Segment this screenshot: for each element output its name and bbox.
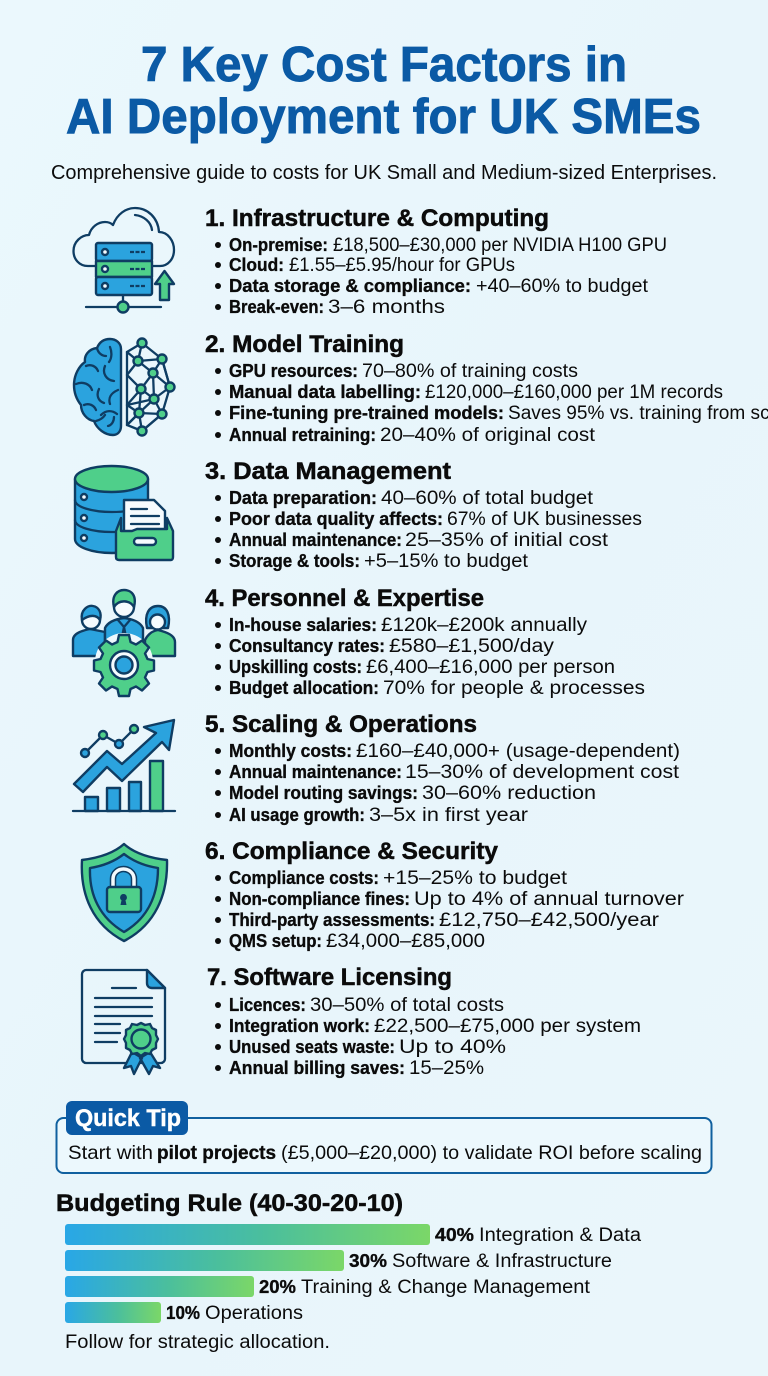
bullet list [215,994,641,1079]
section heading: 5. Scaling & Operations [205,711,477,738]
bullet list: Model routing savings: [229,782,418,803]
panel: budgeting rule [56,1190,641,1353]
section heading: 2. Model Training [205,331,404,358]
bullet list: GPU resources: [229,360,358,381]
bullet list: 3–6 months [328,297,445,318]
section heading: 1. Infrastructure & Computing [205,205,549,232]
bullet list: Manual data labelling: [229,381,421,402]
bullet list: Non-compliance fines: [229,888,410,909]
bullet list: 3–5x in first year [369,805,529,826]
bar: 40 percent: 40% [435,1224,474,1245]
bar: 10 percent: Operations [205,1303,303,1324]
bullet list: Break-even: [229,296,324,317]
bullet list: Compliance costs: [229,867,379,888]
bullet list: 70% for people & processes [383,678,645,699]
bullet list: +5–15% to budget [364,551,529,572]
bullet list: Annual retraining: [229,424,376,445]
bullet list [215,234,667,318]
bullet list: Up to 40% [399,1037,506,1058]
bullet list: +40–60% to budget [476,276,649,297]
bullet list: Annual maintenance: [229,529,402,550]
bullet list: QMS setup: [229,930,322,951]
bullet list [215,487,642,572]
bullet list: £580–£1,500/day [389,636,555,657]
bullet list [215,867,685,952]
title: 7 Key Cost Factors in [141,38,627,92]
icon: brain and neural network [74,338,174,436]
icon: team with gear [73,590,175,696]
bullet list: £160–£40,000+ (usage-dependent) [356,741,680,762]
bullet list [215,614,645,699]
bullet list: Unused seats waste: [229,1036,395,1057]
bullet list: 70–80% of training costs [362,361,578,382]
bullet list: Poor data quality affects: [229,508,443,529]
bullet list: Consultancy rates: [229,635,385,656]
bullet list: AI usage growth: [229,804,365,825]
bullet list: Annual maintenance: [229,761,402,782]
bullet list: Up to 4% of annual turnover [414,889,685,910]
bullet list: 15–30% of development cost [405,762,680,783]
bullet list: £12,750–£42,500/year [439,910,660,931]
bullet list [215,360,768,446]
bullet list: Third-party assessments: [229,909,435,930]
budgeting heading: Budgeting Rule (40-30-20-10) [56,1190,403,1217]
bullet list: 15–25% [409,1058,484,1079]
bullet list: Data preparation: [229,487,377,508]
tip box [56,1118,712,1173]
bullet list: 20–40% of original cost [380,425,596,446]
panel: quick tip [56,1101,712,1173]
subtitle: Comprehensive guide to costs for UK Small and Medium-sized Enterprises. [51,161,717,184]
bar: 10 percent: 10% [166,1302,200,1323]
bullet list: In-house salaries: [229,614,377,635]
bullet list: Budget allocation: [229,677,379,698]
bar: 30 percent [65,1250,612,1272]
title [66,38,701,144]
bullet list: 30–50% of total costs [310,995,504,1016]
bullet list: Storage & tools: [229,550,360,571]
panel: data management [75,458,642,572]
icon: cloud server [74,208,174,312]
bullet list: Upskilling costs: [229,656,362,677]
bullet list: £120k–£200k annually [381,615,588,636]
bullet list: Integration work: [229,1015,370,1036]
bullet list [215,740,680,826]
panel: software licensing [82,964,641,1079]
bullet list: £22,500–£75,000 per system [374,1016,641,1037]
bullet list: Annual billing saves: [229,1057,405,1078]
bar: 20 percent [65,1276,591,1298]
title: AI Deployment for UK SMEs [66,90,701,144]
icon: shield with padlock [82,844,167,941]
panel: personnel and expertise [73,585,645,699]
bullet list: £18,500–£30,000 per NVIDIA H100 GPU [333,235,667,256]
panel: scaling and operations [73,711,680,826]
bullet list: Data storage & compliance: [229,275,471,296]
bar: 20 percent: 20% [259,1276,296,1297]
bullet list: 67% of UK businesses [447,509,642,530]
panel: compliance and security [82,838,685,952]
bullet list: £34,000–£85,000 [326,931,485,952]
icon: growth chart [73,720,175,811]
bar: 20 percent: Training & Change Management [301,1277,591,1298]
bullet list: 25–35% of initial cost [405,530,609,551]
bar: 40 percent [65,1224,641,1246]
section heading: 6. Compliance & Security [205,838,499,865]
closing note: Follow for strategic allocation. [65,1332,330,1353]
tip badge: Quick Tip [75,1105,181,1132]
bullet list: 30–60% reduction [422,783,596,804]
panel: model training [74,331,768,446]
bar: 40 percent: Integration & Data [479,1225,641,1246]
tip text: pilot projects [157,1142,276,1164]
tip text [68,1142,702,1164]
bullet list: Monthly costs: [229,740,352,761]
bullet list: Licences: [229,994,306,1015]
bullet list: On-premise: [229,234,328,255]
section heading: 3. Data Management [205,458,451,485]
bullet list: 40–60% of total budget [381,488,594,509]
panel: infrastructure and computing [74,205,667,318]
bullet list: Cloud: [229,254,284,275]
bullet list: £6,400–£16,000 per person [366,657,615,678]
icon: database and file drawer [75,466,173,560]
tip text: Start with [68,1142,153,1164]
icon: licence document with seal [82,970,165,1074]
bullet list: £1.55–£5.95/hour for GPUs [289,255,515,276]
bullet list: Fine-tuning pre-trained models: [229,402,504,423]
tip text: (£5,000–£20,000) to validate ROI before scaling [281,1142,702,1164]
bar: 30 percent: 30% [349,1250,387,1271]
bar: 10 percent [65,1302,303,1324]
bar: 30 percent: Software & Infrastructure [392,1251,612,1272]
section heading: 7. Software Licensing [207,964,452,991]
bullet list: +15–25% to budget [383,868,568,889]
section heading: 4. Personnel & Expertise [205,585,484,612]
bullet list: £120,000–£160,000 per 1M records [425,382,723,403]
